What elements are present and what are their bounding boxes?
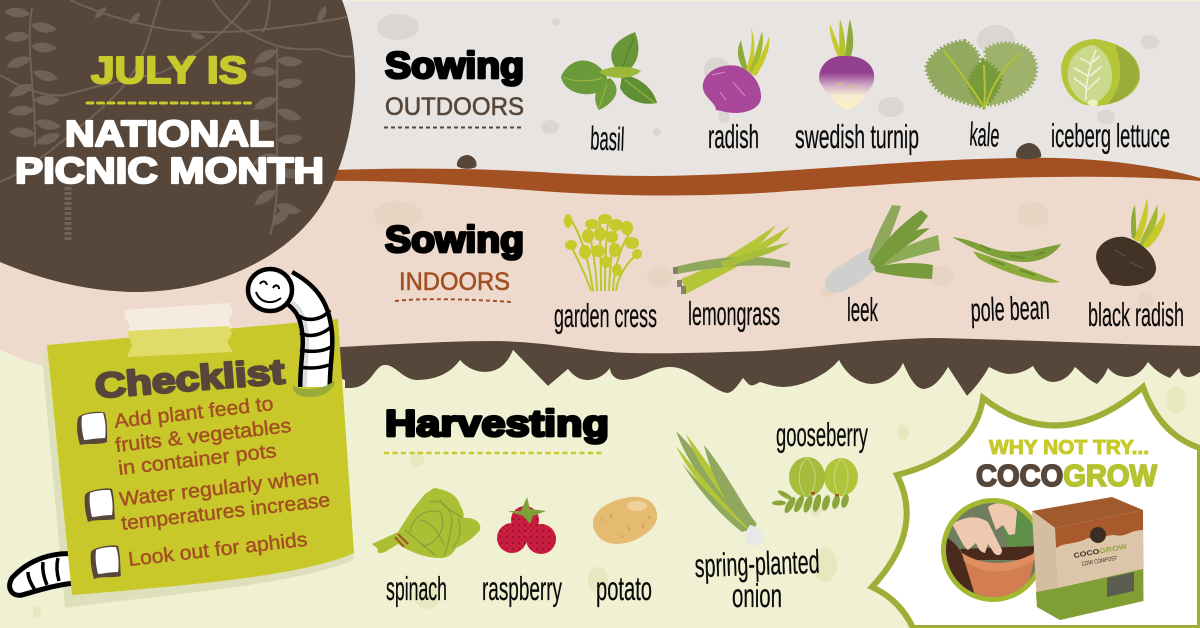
background: dark soil band with scallops bbox=[340, 338, 1200, 396]
checkbox 1 bbox=[77, 412, 107, 445]
photo: hands potting a plant bbox=[941, 498, 1036, 602]
title line: National: NATIONAL bbox=[65, 113, 274, 154]
dark title panel bbox=[0, 0, 355, 292]
checklist item 1: Add plant feed to bbox=[113, 393, 275, 433]
box front top colour bbox=[1055, 510, 1143, 548]
checklist item 2: temperatures increase bbox=[120, 489, 331, 535]
worm hole crescent bbox=[293, 380, 335, 397]
promo burst panel: Why not try CocoGrow bbox=[872, 387, 1200, 628]
title line: Picnic Month: PICNIC MONTH bbox=[15, 150, 324, 191]
box front bbox=[1055, 510, 1144, 620]
heading word: Harvesting bbox=[385, 403, 609, 444]
label: spring-planted onion bbox=[694, 543, 820, 614]
checkbox 2 bbox=[85, 488, 115, 522]
heading word: Sowing: Sowing bbox=[385, 219, 524, 260]
label: spinach: spinach bbox=[386, 570, 447, 607]
heading dashes bbox=[395, 299, 511, 302]
label: spring-planted onion: onion bbox=[732, 577, 782, 614]
label: swedish turnip: swedish turnip bbox=[795, 118, 919, 155]
title: July is National Picnic Month bbox=[15, 50, 324, 191]
label: garden cress: garden cress bbox=[554, 297, 657, 334]
checklist note bbox=[10, 319, 354, 608]
promo line: CocoGrow: COCOGROW bbox=[976, 458, 1158, 493]
icon: leek bbox=[825, 205, 940, 293]
checklist title: Checklist bbox=[94, 352, 286, 406]
decorative vine leaves bbox=[4, 3, 331, 227]
label: spring-planted onion: spring-planted bbox=[694, 543, 820, 584]
title line: July is: JULY IS bbox=[91, 50, 247, 92]
box side bbox=[1032, 511, 1060, 620]
icon: radish bbox=[703, 27, 769, 113]
heading dashes bbox=[384, 126, 524, 128]
icon: lemongrass bbox=[673, 225, 790, 294]
worm: lower segment behind note bbox=[10, 554, 75, 595]
checklist item 1: fruits & vegetables bbox=[114, 415, 292, 457]
note shadow bbox=[42, 350, 354, 608]
title divider dashes bbox=[87, 102, 254, 104]
subheading: Outdoors: OUTDOORS bbox=[385, 93, 524, 121]
background: pink soil layer bbox=[0, 177, 1200, 400]
promo line: why not try: WHY NOT TRY... bbox=[989, 437, 1149, 459]
icon: basil bbox=[561, 32, 657, 110]
label: basil: basil bbox=[590, 119, 625, 158]
tape over note bbox=[127, 326, 233, 357]
box top bbox=[1032, 497, 1143, 528]
box brand text: COCO GROW bbox=[1073, 544, 1128, 560]
box photo bbox=[1107, 572, 1134, 597]
box lower green panel bbox=[1036, 569, 1143, 620]
icon: potato bbox=[593, 497, 657, 544]
icon: iceberg lettuce bbox=[1061, 39, 1140, 106]
label: radish: radish bbox=[708, 118, 759, 155]
icon: spinach bbox=[372, 488, 480, 558]
checkbox 3 bbox=[91, 545, 121, 579]
product box: CocoGrow coir compost bbox=[1032, 497, 1144, 620]
checklist item 1 bbox=[113, 393, 292, 480]
label: leek: leek bbox=[847, 291, 878, 328]
icon: kale bbox=[926, 41, 1036, 107]
checklist item 1: in container pots bbox=[117, 440, 278, 480]
icon: pole bean bbox=[952, 237, 1061, 283]
decorative vines bbox=[0, 0, 353, 240]
heading word: Sowing: Sowing bbox=[385, 45, 524, 86]
label: potato: potato bbox=[596, 570, 652, 607]
heading: Sowing indoors bbox=[385, 219, 524, 302]
icon: gooseberry bbox=[772, 457, 858, 515]
checklist item 3: Look out for aphids bbox=[127, 529, 308, 571]
icon: raspberry bbox=[497, 497, 556, 554]
icon: swedish turnip bbox=[819, 19, 874, 109]
background: cream layer bbox=[0, 350, 1200, 628]
icon: garden cress bbox=[564, 214, 642, 291]
heading dashes bbox=[384, 452, 604, 454]
box emblem bbox=[1090, 527, 1106, 543]
label: pole bean: pole bean bbox=[970, 289, 1050, 328]
label: gooseberry: gooseberry bbox=[776, 416, 868, 453]
background: rust soil band bbox=[330, 158, 1200, 230]
checklist item 2 bbox=[118, 466, 331, 535]
rocks bbox=[457, 143, 1041, 169]
heading: Sowing outdoors bbox=[384, 45, 524, 128]
checklist item 2: Water regularly when bbox=[118, 466, 320, 511]
icon: black radish bbox=[1096, 198, 1165, 286]
label: kale: kale bbox=[969, 115, 1001, 154]
label: lemongrass: lemongrass bbox=[688, 295, 780, 332]
background: grey top layer bbox=[0, 1, 1200, 201]
worm: smiling head and upper segment bbox=[248, 269, 331, 387]
box product text: COIR COMPOST bbox=[1081, 556, 1118, 568]
label: raspberry: raspberry bbox=[482, 570, 562, 607]
burst background bbox=[872, 387, 1200, 628]
icon: spring onion bbox=[676, 431, 763, 546]
note paper bbox=[47, 319, 354, 595]
tape strip on pink bbox=[124, 303, 233, 335]
subheading: Indoors: INDOORS bbox=[399, 268, 510, 296]
